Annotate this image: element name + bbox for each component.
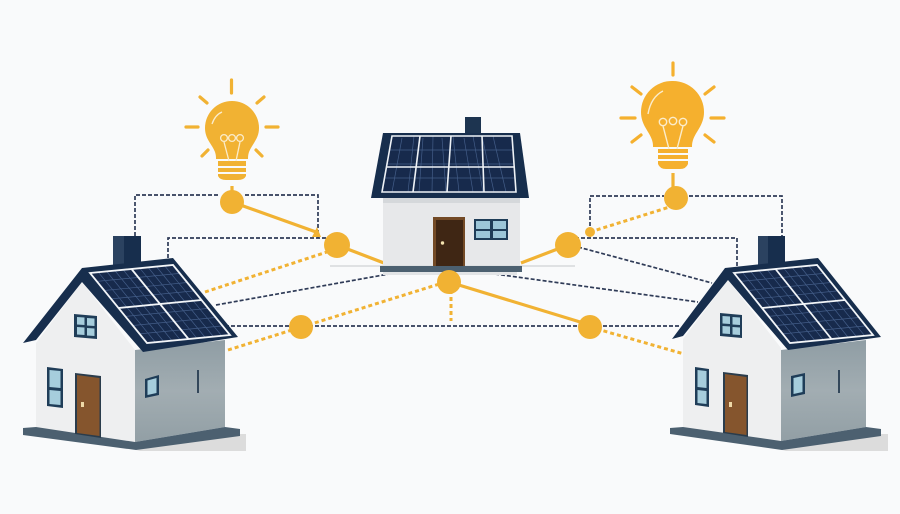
window: gable [74,314,97,339]
dotted energy lines [205,205,684,354]
white wall [683,280,781,441]
window: tall [47,367,63,408]
node: left bulb [220,190,244,214]
window: tall [695,367,709,407]
window panes [476,221,506,238]
front step shadow [383,272,517,275]
node: small left junction [312,227,321,237]
solar panels [734,265,873,343]
chimney side [113,236,124,266]
window: side [145,375,159,398]
base [380,266,522,272]
base [670,427,881,450]
node: right junction [555,232,581,258]
node: lower right [578,315,602,339]
node: left junction [324,232,350,258]
chimney [758,236,785,266]
door knob [441,241,444,245]
solid energy lines [232,173,673,325]
house: centre [330,117,575,275]
door [75,373,101,438]
roof [371,133,529,198]
roof [23,258,238,352]
network lines [135,173,782,354]
wall [383,196,520,267]
ground shadow [782,434,888,451]
white wall [36,282,135,442]
window: side [791,373,805,397]
ground shadow [136,434,246,451]
eave shadow [383,198,520,203]
dashed grid lines [135,195,782,326]
house: right [670,236,888,451]
node: right bulb [664,186,688,210]
solar panels [382,136,516,192]
icon: left light bulb [186,80,278,180]
door panel [436,220,463,266]
vent [197,370,199,393]
window: gable [720,313,742,338]
node: small right junction [585,227,595,237]
house: left [23,236,246,451]
grey wall [135,340,225,442]
ground shadow [330,265,575,267]
node: centre [437,270,461,294]
node: lower left [289,315,313,339]
base [23,427,240,450]
solar panels [90,265,230,343]
door [723,372,748,437]
door [433,217,465,266]
chimney [113,236,141,266]
window [474,219,508,240]
chimney [465,117,481,135]
roof [672,258,881,350]
vent [838,370,840,393]
icon: right light bulb [621,63,724,169]
chimney side [758,236,768,266]
grey wall [781,340,866,441]
